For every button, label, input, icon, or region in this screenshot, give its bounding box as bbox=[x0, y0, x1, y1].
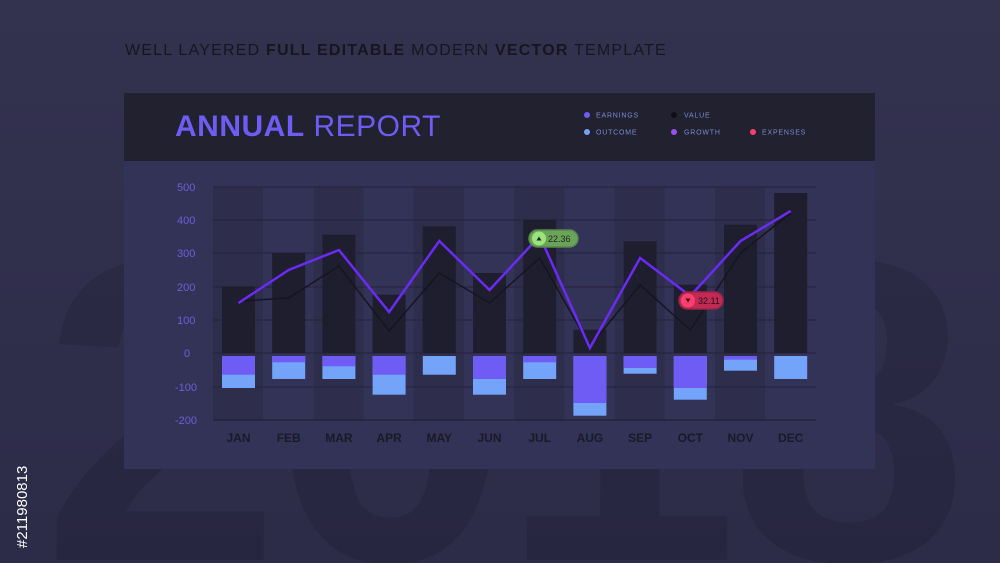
legend bbox=[584, 112, 806, 136]
y axis labels bbox=[175, 182, 197, 427]
legend: EARNINGS bbox=[596, 112, 639, 120]
badge: down 32.11 bbox=[679, 292, 723, 309]
month labels: NOV bbox=[727, 431, 754, 445]
y axis labels: 0 bbox=[184, 348, 190, 360]
title: ANNUAL REPORT bbox=[175, 110, 441, 143]
legend: GROWTH bbox=[684, 130, 721, 136]
legend: VALUE bbox=[684, 112, 710, 120]
y axis labels: 300 bbox=[177, 248, 195, 260]
y axis labels: 500 bbox=[177, 182, 195, 194]
legend: EXPENSES bbox=[762, 130, 806, 136]
month labels: JAN bbox=[226, 431, 251, 445]
y axis labels: 400 bbox=[177, 215, 195, 227]
month labels: SEP bbox=[628, 431, 652, 445]
month labels: DEC bbox=[778, 431, 804, 445]
y axis labels: -200 bbox=[175, 415, 197, 427]
value line bbox=[238, 213, 791, 346]
month labels: APR bbox=[376, 431, 402, 445]
badge: up 22.36: 22.36 bbox=[548, 234, 571, 244]
outcome bars bbox=[222, 356, 807, 416]
value bars bbox=[222, 193, 807, 353]
y axis labels: -100 bbox=[175, 382, 197, 394]
month labels: MAY bbox=[427, 431, 452, 445]
badge: up 22.36 bbox=[529, 230, 578, 247]
legend: OUTCOME bbox=[596, 130, 637, 136]
month labels: AUG bbox=[577, 431, 603, 445]
month labels: JUN bbox=[477, 431, 502, 445]
growth line bbox=[238, 211, 791, 348]
badge: down 32.11: 32.11 bbox=[698, 296, 720, 306]
month labels: OCT bbox=[678, 431, 704, 445]
chart bbox=[175, 182, 816, 445]
panel header bbox=[124, 93, 875, 161]
side stock id: #211980813 bbox=[14, 466, 31, 548]
earnings bars bbox=[222, 356, 757, 403]
y axis labels: 200 bbox=[177, 282, 195, 294]
month labels: FEB bbox=[277, 431, 301, 445]
month labels: JUL bbox=[528, 431, 551, 445]
subtitle: WELL LAYERED FULL EDITABLE MODERN VECTOR TEMPLATE bbox=[125, 42, 667, 59]
panel: annual report bbox=[124, 93, 875, 469]
y axis labels: 100 bbox=[177, 315, 195, 327]
month labels bbox=[226, 431, 804, 445]
month labels: MAR bbox=[325, 431, 353, 445]
